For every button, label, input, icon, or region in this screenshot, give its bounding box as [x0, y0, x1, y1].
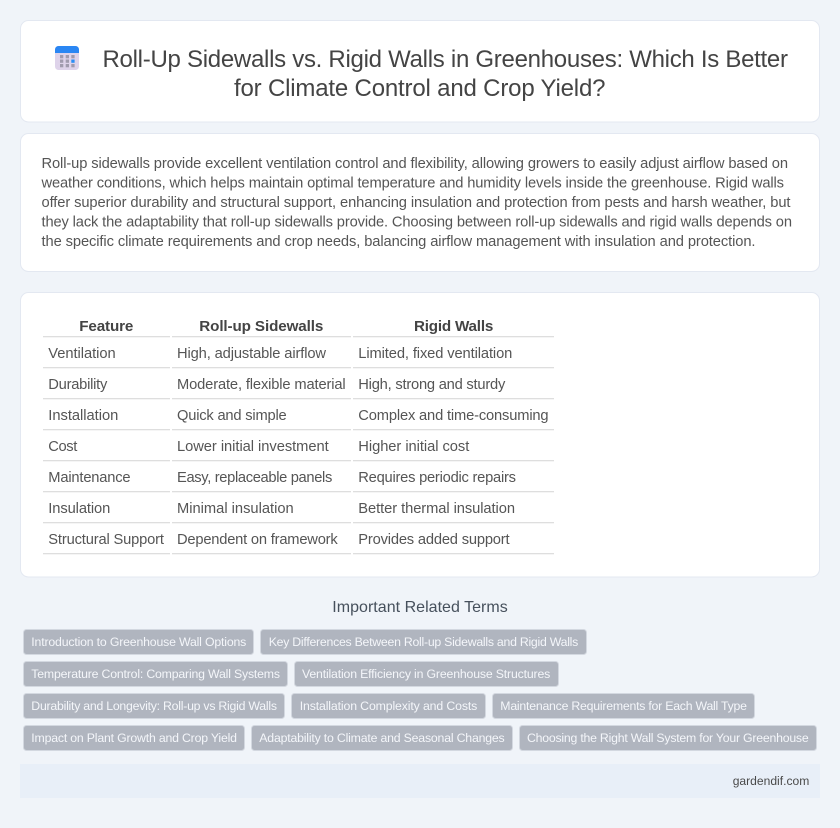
table row: cost: Cost: [48, 439, 77, 455]
table row: insulation: Better thermal insulation: [358, 501, 515, 517]
tag: key differences: Key Differences Between Roll-up Sidewalls and Rigid Walls: [269, 635, 578, 649]
tag: temperature control: Temperature Control: Comparing Wall Systems: [31, 667, 280, 681]
tag: temperature control: [24, 662, 288, 686]
table row: installation: Quick and simple: [177, 408, 287, 424]
table row: ventilation: [43, 346, 554, 368]
table row: structural support: Dependent on framework: [177, 532, 338, 548]
table row: cost: Lower initial investment: [177, 439, 329, 455]
tag: ventilation efficiency: Ventilation Efficiency in Greenhouse Structures: [302, 667, 550, 681]
footer: [20, 764, 820, 798]
tag: choosing the right system: [520, 726, 816, 750]
table row: cost: [43, 439, 554, 461]
text block: introduction paragraph: they lack the adaptability that roll-up sidewalls provide. Choosing between roll-up sidewalls and rigid walls depends on: [42, 214, 792, 230]
tag: choosing the right system: Choosing the Right Wall System for Your Greenhouse: [527, 731, 809, 745]
heading: important related terms: Important Related Terms: [332, 599, 508, 616]
tag: key differences: [260, 630, 586, 654]
panel: comparison table: [20, 292, 820, 577]
text block: introduction paragraph: weather conditions, which helps maintain optimal temperature and humidity levels inside the greenhouse. Rigid walls: [40, 176, 784, 192]
table row: insulation: [43, 501, 554, 523]
tag: installation complexity: [292, 694, 486, 718]
table row: durability: [43, 377, 554, 399]
text block: introduction paragraph: offer superior durability and structural support, enhancing insulation and protection from pests and harsh weather, but: [42, 195, 790, 211]
icon: calendar: [55, 46, 79, 70]
tag: installation complexity: Installation Complexity and Costs: [300, 699, 477, 713]
panel: introduction: [20, 134, 820, 272]
tag: adaptability: Adaptability to Climate and Seasonal Changes: [259, 731, 505, 745]
table row: durability: Moderate, flexible material: [177, 377, 346, 393]
table row: installation: [43, 408, 554, 430]
table header: Rigid Walls: [414, 318, 493, 335]
tag: introduction: Introduction to Greenhouse Wall Options: [31, 635, 246, 649]
tag: plant growth impact: [24, 726, 244, 750]
table row: ventilation: Limited, fixed ventilation: [358, 346, 512, 362]
table row: installation: Installation: [48, 408, 118, 424]
table row: insulation: Minimal insulation: [177, 501, 294, 517]
footer source text: gardendif.com: [733, 774, 809, 788]
tag: maintenance requirements: [492, 694, 754, 718]
table row: structural support: [43, 532, 554, 554]
table row: maintenance: [43, 470, 554, 492]
tag: plant growth impact: Impact on Plant Growth and Crop Yield: [31, 731, 237, 745]
table row: durability: Durability: [48, 377, 108, 393]
tag: durability and longevity: Durability and Longevity: Roll-up vs Rigid Walls: [31, 699, 277, 713]
table row: maintenance: Maintenance: [48, 470, 131, 486]
table row: cost: Higher initial cost: [358, 439, 469, 455]
table row: durability: High, strong and sturdy: [358, 377, 506, 393]
tag: introduction: [24, 630, 254, 654]
tag: maintenance requirements: Maintenance Requirements for Each Wall Type: [500, 699, 747, 713]
table row: ventilation: Ventilation: [48, 346, 116, 362]
text block: introduction paragraph: [40, 156, 792, 250]
tag: adaptability: [252, 726, 512, 750]
table header: [43, 318, 554, 337]
table row: structural support: Structural Support: [48, 532, 164, 548]
panel: related term tags: [24, 630, 816, 750]
title: for Climate Control and Crop Yield?: [234, 75, 606, 102]
table row: installation: Complex and time-consuming: [358, 408, 549, 424]
title: [102, 46, 788, 102]
panel: title header: [20, 20, 820, 122]
tag: ventilation efficiency: [294, 662, 558, 686]
tag: durability and longevity: [24, 694, 284, 718]
table header: Feature: [79, 318, 133, 335]
table header: Roll-up Sidewalls: [199, 318, 323, 335]
text block: introduction paragraph: Roll-up sidewalls provide excellent ventilation control and flexibility, allowing growers to easily adjust airflow based on: [42, 156, 788, 172]
table row: maintenance: Easy, replaceable panels: [177, 470, 332, 486]
table row: maintenance: Requires periodic repairs: [358, 470, 516, 486]
text block: introduction paragraph: the specific climate requirements and crop needs, balancing airflow management with insulation and protection.: [42, 234, 756, 250]
title: Roll-Up Sidewalls vs. Rigid Walls in Greenhouses: Which Is Better: [102, 46, 788, 73]
table row: ventilation: High, adjustable airflow: [177, 346, 326, 362]
table row: structural support: Provides added support: [358, 532, 510, 548]
table row: insulation: Insulation: [48, 501, 110, 517]
